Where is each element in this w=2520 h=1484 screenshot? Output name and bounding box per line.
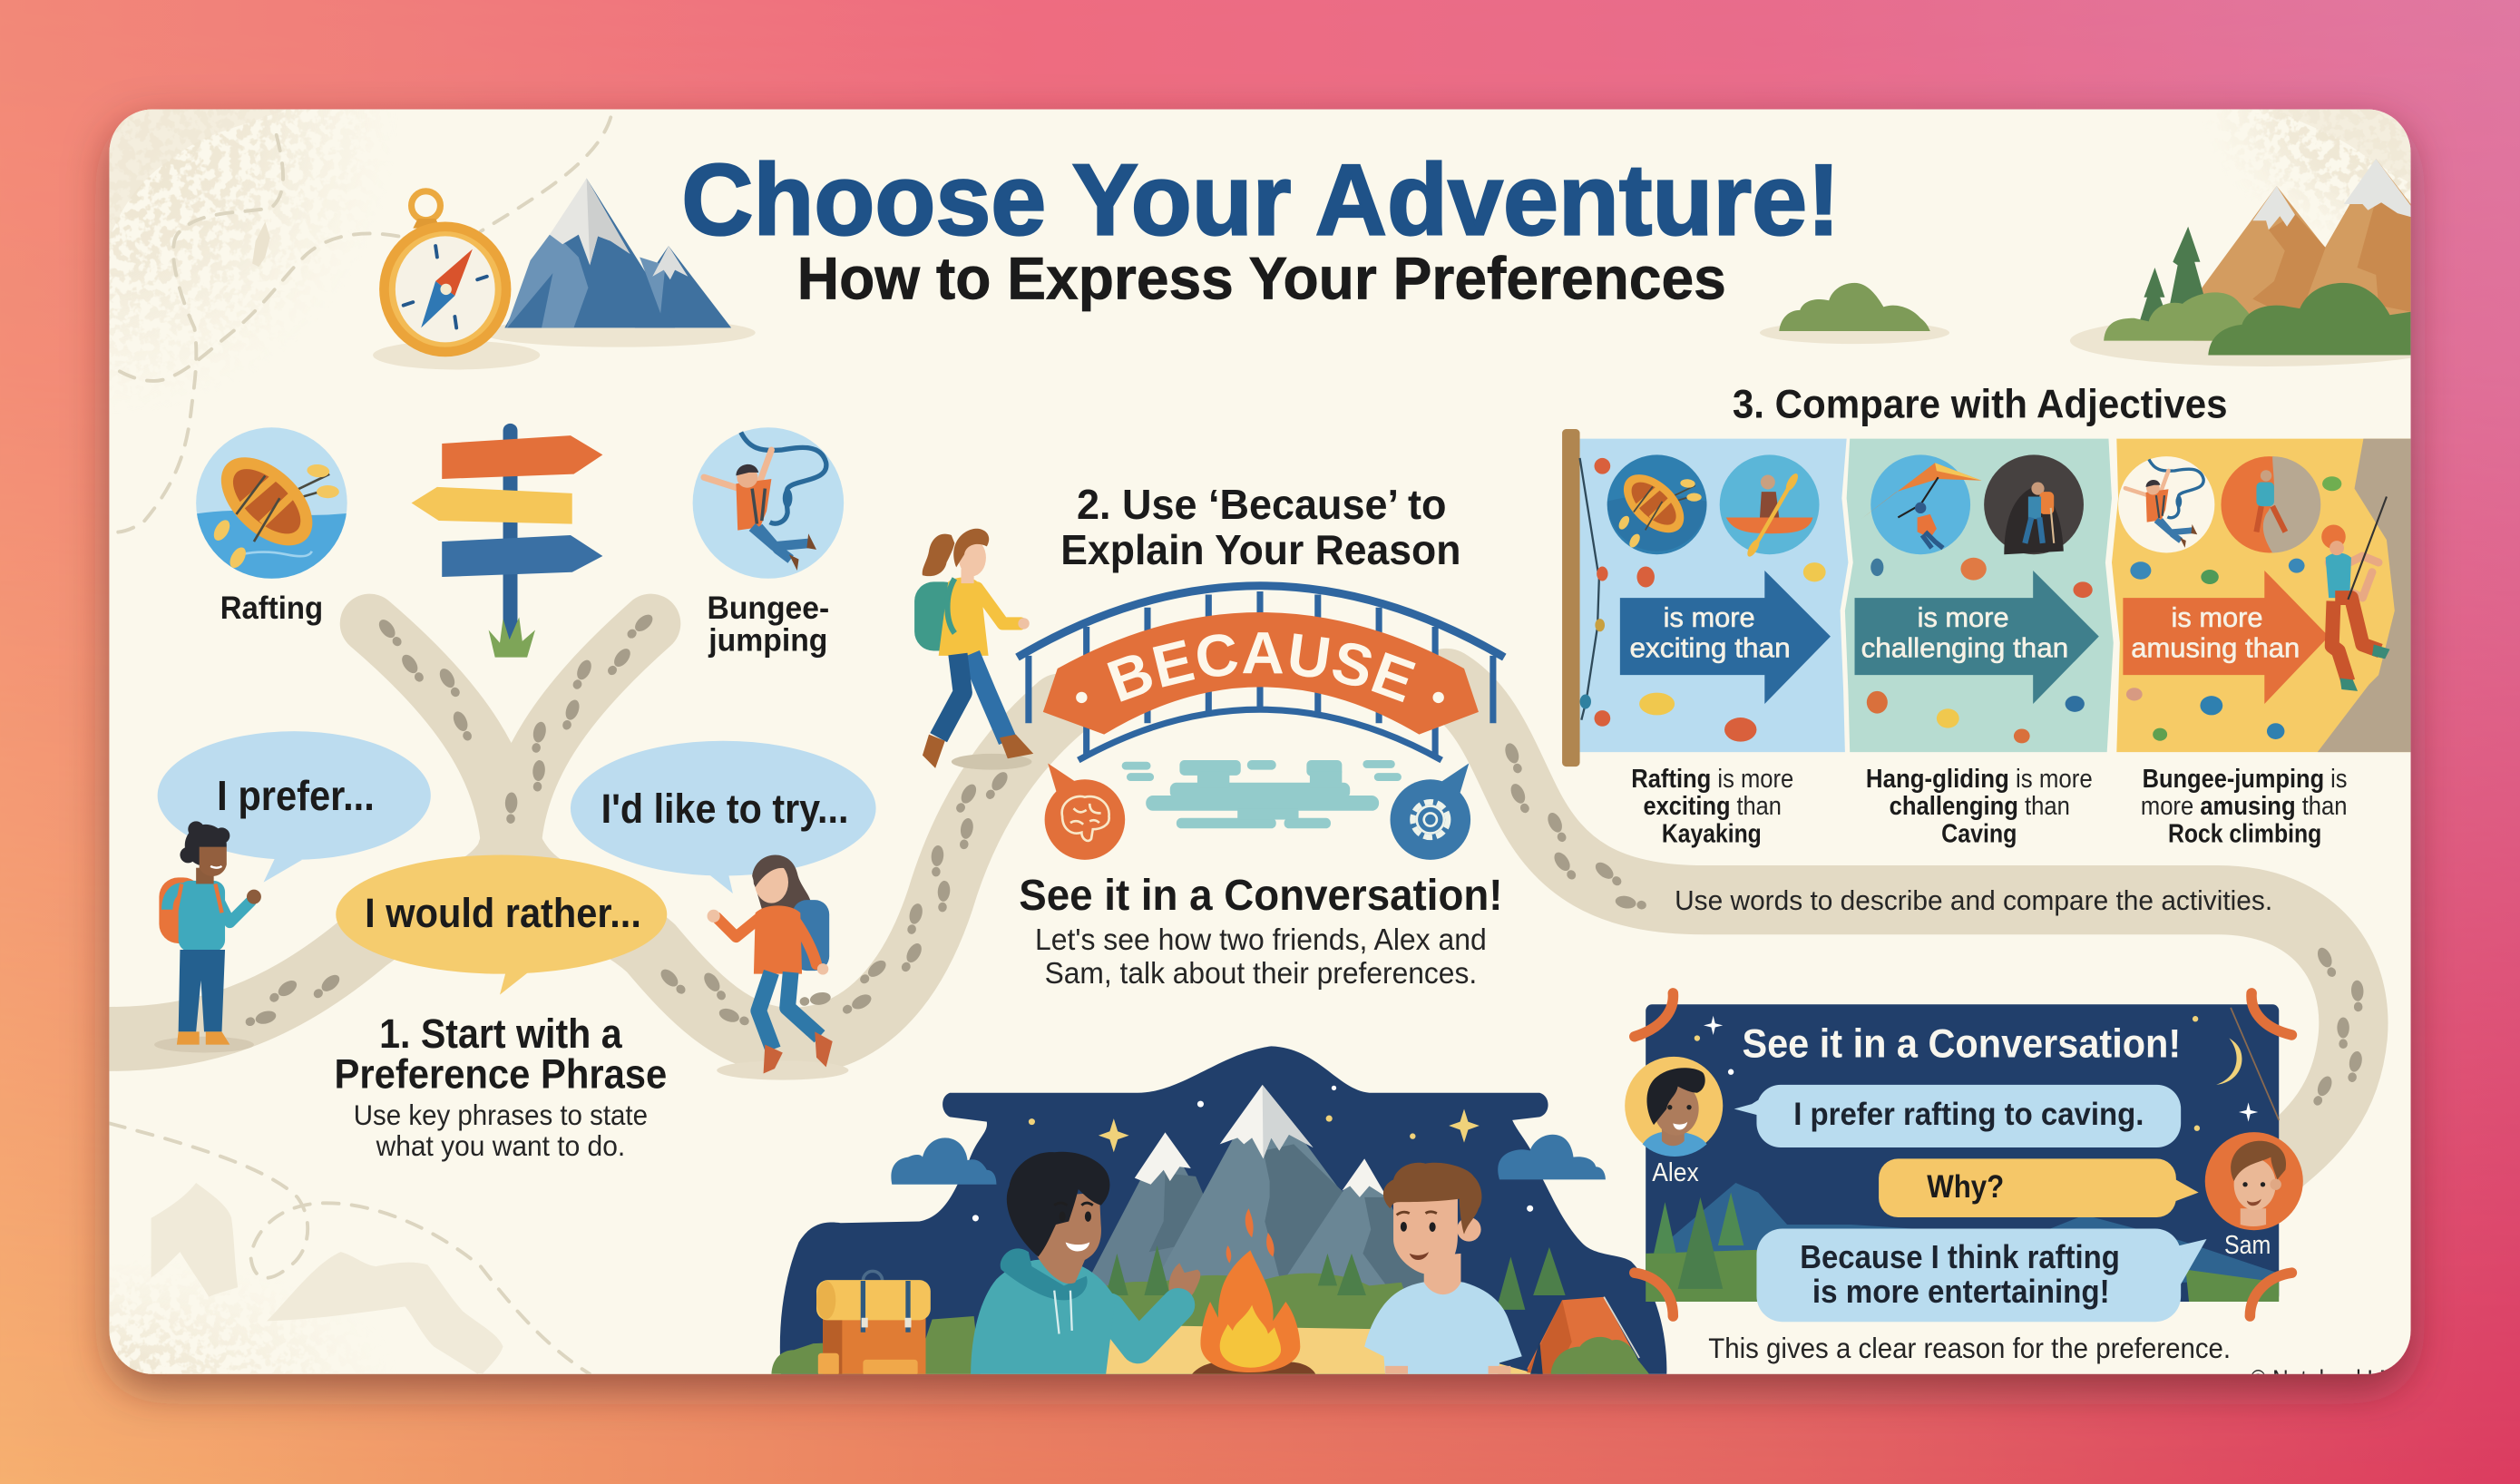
caption: hang-gliding vs caving: Caving — [1941, 819, 2017, 848]
text: use words to describe: Use words to describe and compare the activities. — [1675, 884, 2272, 916]
climbing wall panels — [1562, 429, 2411, 766]
text: step 1 description — [354, 1098, 648, 1162]
icon: rafting — [196, 427, 347, 579]
bridge with BECAUSE banner — [1015, 581, 1506, 764]
speech bubble: I would rather: I would rather... — [365, 890, 641, 936]
bubble: Why — [1879, 1158, 2199, 1217]
heading: step 1 — [335, 1010, 667, 1097]
text: conversation intro — [1035, 923, 1487, 991]
speech bubble: I would rather — [336, 855, 667, 995]
card panel — [109, 109, 2411, 1374]
avatar: Sam — [2205, 1132, 2303, 1260]
caption: hang-gliding vs caving — [1866, 765, 2093, 848]
label: Rafting: Rafting — [220, 590, 323, 626]
watermark text: © NotebookLM — [2250, 1366, 2398, 1396]
mountains — [1077, 1085, 1439, 1302]
text: step 1 description: what you want to do. — [376, 1129, 625, 1162]
winding tan footpath — [81, 623, 2353, 1165]
avatar: Alex: Alex — [1652, 1158, 1699, 1187]
footprints along the path — [244, 611, 2365, 1108]
caption: bungee-jumping vs rock climbing: Rock climbing — [2168, 819, 2321, 848]
sky decorations — [1695, 1016, 2258, 1131]
label: Bungee-jumping — [708, 597, 828, 658]
character: boy with backpack — [154, 821, 261, 1052]
subtitle: How to Express Your Preferences — [797, 246, 1726, 312]
speech bubble: I prefer — [158, 731, 431, 883]
text: clear reason note: This gives a clear reason for the preference. — [1708, 1332, 2231, 1364]
panel: exciting — [1580, 439, 1848, 752]
text: conversation intro: Sam, talk about their preferences. — [1045, 957, 1477, 991]
panel title: See it in a Conversation! — [1743, 1022, 2181, 1067]
bubble: Why: Why? — [1927, 1168, 2004, 1205]
person: Alex with hoodie — [971, 1152, 1200, 1376]
icon: gear bubble — [1391, 764, 1470, 860]
icon: mountains and trees top right — [2070, 159, 2411, 366]
night sky shape — [780, 1046, 1666, 1376]
bubble: Because I think rafting: is more entertaining! — [1812, 1273, 2110, 1310]
left bush — [771, 1316, 981, 1376]
speech bubble: I'd like to try: I'd like to try... — [601, 786, 848, 832]
water under the bridge — [1122, 760, 1402, 828]
panel: challenging — [1845, 439, 2114, 752]
caption: rafting vs kayaking: Rafting is more — [1631, 765, 1793, 794]
caption: hang-gliding vs caving: challenging than — [1890, 792, 2070, 821]
stars — [972, 1086, 1533, 1221]
person: Sam in t-shirt — [1364, 1163, 1522, 1376]
clouds — [891, 1135, 1606, 1185]
caption: rafting vs kayaking: Kayaking — [1662, 819, 1762, 848]
campfire scene — [771, 1046, 1666, 1379]
icon: signpost — [412, 424, 602, 658]
text: conversation intro: Let's see how two friends, Alex and — [1035, 923, 1487, 957]
caption: rafting vs kayaking: exciting than — [1644, 792, 1782, 821]
panel: challenging: is more — [1918, 601, 2009, 633]
character: rock climber — [2321, 496, 2389, 691]
heading: See it in a Conversation: See it in a Conversation! — [1019, 872, 1503, 920]
hills and sand — [1080, 1274, 1433, 1379]
label: Bungee-jumping: Bungee- — [708, 590, 829, 626]
heading: step 2: 2. Use ‘Because’ to — [1077, 481, 1447, 528]
caption: bungee-jumping vs rock climbing — [2141, 765, 2348, 848]
icon: compass and mountain — [373, 179, 756, 369]
icon: brain bubble — [1045, 764, 1125, 860]
tent — [1527, 1297, 1651, 1376]
icon: green bush — [1760, 283, 1949, 344]
bubble: Because I think rafting — [1756, 1228, 2207, 1322]
wooden post and rope — [1562, 429, 1610, 766]
pine trees — [1106, 1245, 1566, 1310]
speech bubble: I prefer: I prefer... — [217, 772, 375, 819]
character: walking girl — [914, 529, 1033, 770]
text: step 1 description: Use key phrases to state — [354, 1098, 648, 1131]
map texture background — [109, 109, 2411, 1376]
corner tabs — [1635, 993, 2291, 1316]
panel: amusing: amusing than — [2131, 632, 2300, 664]
panel: challenging: challenging than — [1861, 632, 2068, 664]
heading: step 3: 3. Compare with Adjectives — [1733, 383, 2228, 427]
icon: bungee-jumping — [693, 427, 844, 579]
caption: bungee-jumping vs rock climbing: more amusing than — [2141, 792, 2348, 821]
avatar: Sam: Sam — [2224, 1231, 2271, 1260]
panel: exciting: exciting than — [1629, 632, 1791, 664]
caption: rafting vs kayaking — [1631, 765, 1793, 848]
heading: step 1: 1. Start with a — [379, 1010, 622, 1057]
panel: amusing — [2112, 439, 2411, 752]
bubble: Because I think rafting: Because I think rafting — [1800, 1238, 2120, 1275]
backpack — [816, 1271, 931, 1376]
heading: step 2: Explain Your Reason — [1060, 526, 1460, 573]
bridge with BECAUSE banner: BECAUSE — [1107, 632, 1416, 702]
avatar: Alex — [1625, 1057, 1723, 1187]
speech bubble: I'd like to try — [571, 741, 876, 893]
panel: exciting: is more — [1664, 601, 1755, 633]
conversation panel — [1625, 993, 2303, 1322]
bubble: I prefer rafting to caving: I prefer rafting to caving. — [1793, 1096, 2144, 1132]
title: Choose Your Adventure! — [681, 143, 1841, 257]
rock holds — [1636, 476, 2341, 743]
caption: bungee-jumping vs rock climbing: Bungee-jumping is — [2143, 765, 2348, 794]
bubble: I prefer rafting to caving — [1734, 1085, 2181, 1147]
heading: step 2 — [1060, 481, 1460, 573]
heading: step 1: Preference Phrase — [335, 1050, 667, 1097]
label: Bungee-jumping: jumping — [708, 622, 827, 659]
character: girl with backpack — [708, 854, 848, 1080]
panel: amusing: is more — [2172, 601, 2263, 633]
caption: hang-gliding vs caving: Hang-gliding is more — [1866, 765, 2093, 794]
campfire — [1191, 1208, 1316, 1376]
scenery: mountains trees and hill — [1646, 1183, 2279, 1302]
